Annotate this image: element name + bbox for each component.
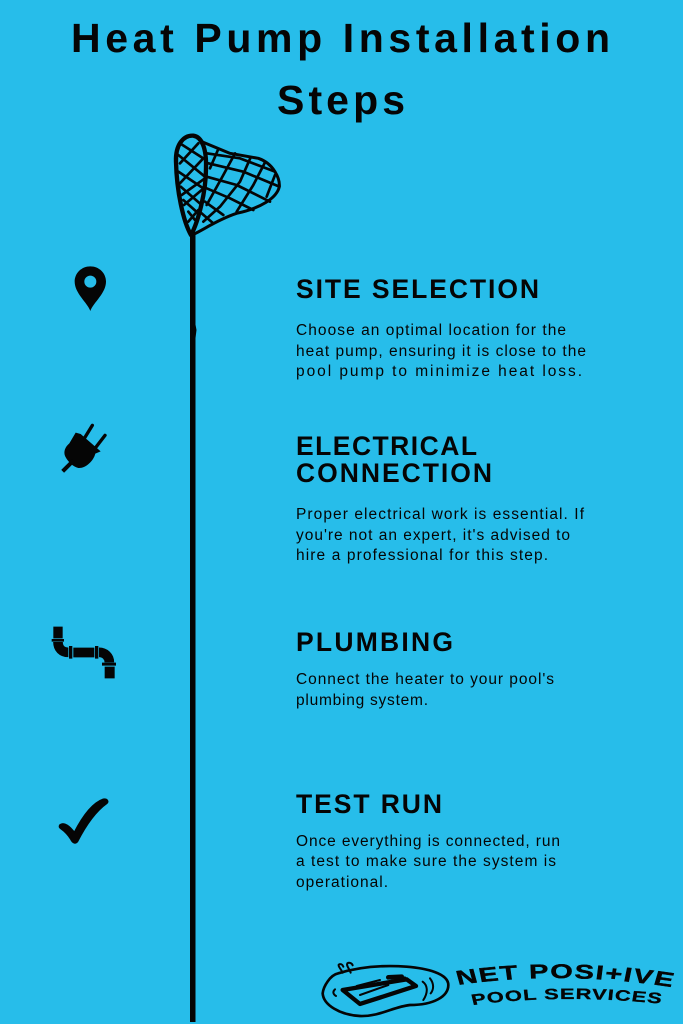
title: Heat Pump Installation <box>71 15 610 61</box>
heading: electrical connection: ELECTRICAL <box>296 431 477 461</box>
logo text: NET POSI+IVE <box>456 964 674 988</box>
text: test run: operational. <box>296 874 388 891</box>
text: plumbing: plumbing system. <box>296 692 428 709</box>
text: plumbing: Connect the heater to your pool's <box>296 671 554 688</box>
heading: site selection: SITE SELECTION <box>296 274 539 304</box>
title: Steps <box>277 77 405 123</box>
icon: check mark <box>60 799 108 843</box>
icon: electrical plug <box>63 425 105 471</box>
text: test run: Once everything is connected, run <box>296 833 560 850</box>
heading: electrical connection <box>296 431 492 488</box>
text: electrical connection <box>296 506 585 564</box>
text: site selection: heat pump, ensuring it is close to the <box>296 343 586 360</box>
icon: location pin <box>75 266 106 311</box>
heading: electrical connection: CONNECTION <box>296 458 492 488</box>
text: site selection: Choose an optimal location for the <box>296 322 566 339</box>
text: test run: a test to make sure the system is <box>296 853 556 870</box>
title <box>71 15 610 123</box>
logo icon: pool with float <box>323 963 448 1016</box>
heading: test run: TEST RUN <box>296 789 442 819</box>
text: electrical connection: hire a professional for this step. <box>296 547 548 564</box>
text: electrical connection: you're not an expert, it's advised to <box>296 527 570 544</box>
icon: pool skimmer net and pole <box>176 136 279 1022</box>
heading: plumbing: PLUMBING <box>296 627 453 657</box>
text: plumbing <box>296 671 554 709</box>
logo: net positive pool services <box>321 962 674 1018</box>
text: test run <box>296 833 560 891</box>
text: site selection: pool pump to minimize heat loss. <box>296 363 582 380</box>
logo text: POOL SERVICES <box>471 988 662 1005</box>
net <box>176 136 279 235</box>
logo text <box>456 964 674 1005</box>
text: site selection <box>296 322 586 380</box>
pole <box>190 232 196 1022</box>
icon: pipe <box>52 627 116 678</box>
text: electrical connection: Proper electrical work is essential. If <box>296 506 585 523</box>
